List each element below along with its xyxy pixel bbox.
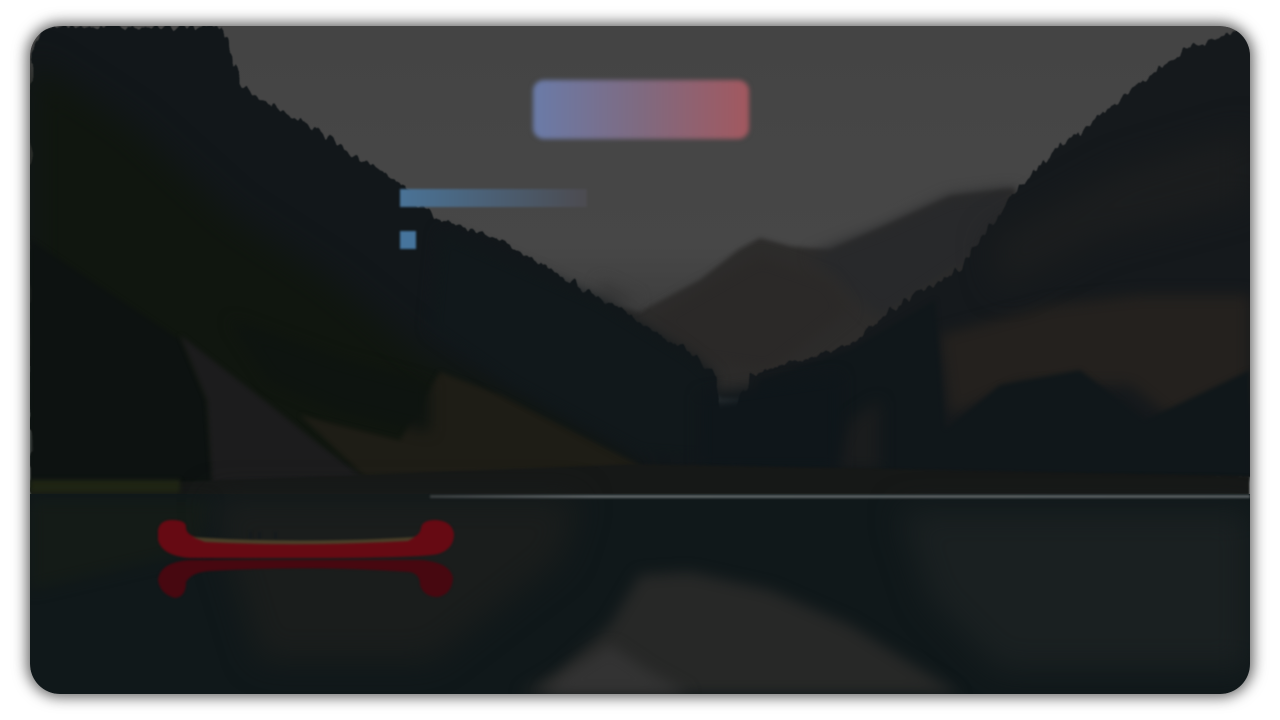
water horizon glint	[430, 495, 1250, 498]
subtitle placeholder bar	[400, 189, 587, 207]
distant mountain	[590, 188, 1020, 400]
red canoe	[158, 520, 454, 558]
sky	[30, 26, 1250, 366]
shoreline foliage	[30, 480, 180, 493]
small square marker	[400, 231, 416, 249]
title placeholder bar	[533, 80, 749, 139]
canoe seats	[249, 532, 277, 539]
left mountain	[30, 26, 748, 494]
canoe reflection	[158, 560, 453, 598]
lake water	[30, 494, 1250, 694]
right mountain	[700, 28, 1256, 480]
far shoreline	[30, 466, 1250, 494]
